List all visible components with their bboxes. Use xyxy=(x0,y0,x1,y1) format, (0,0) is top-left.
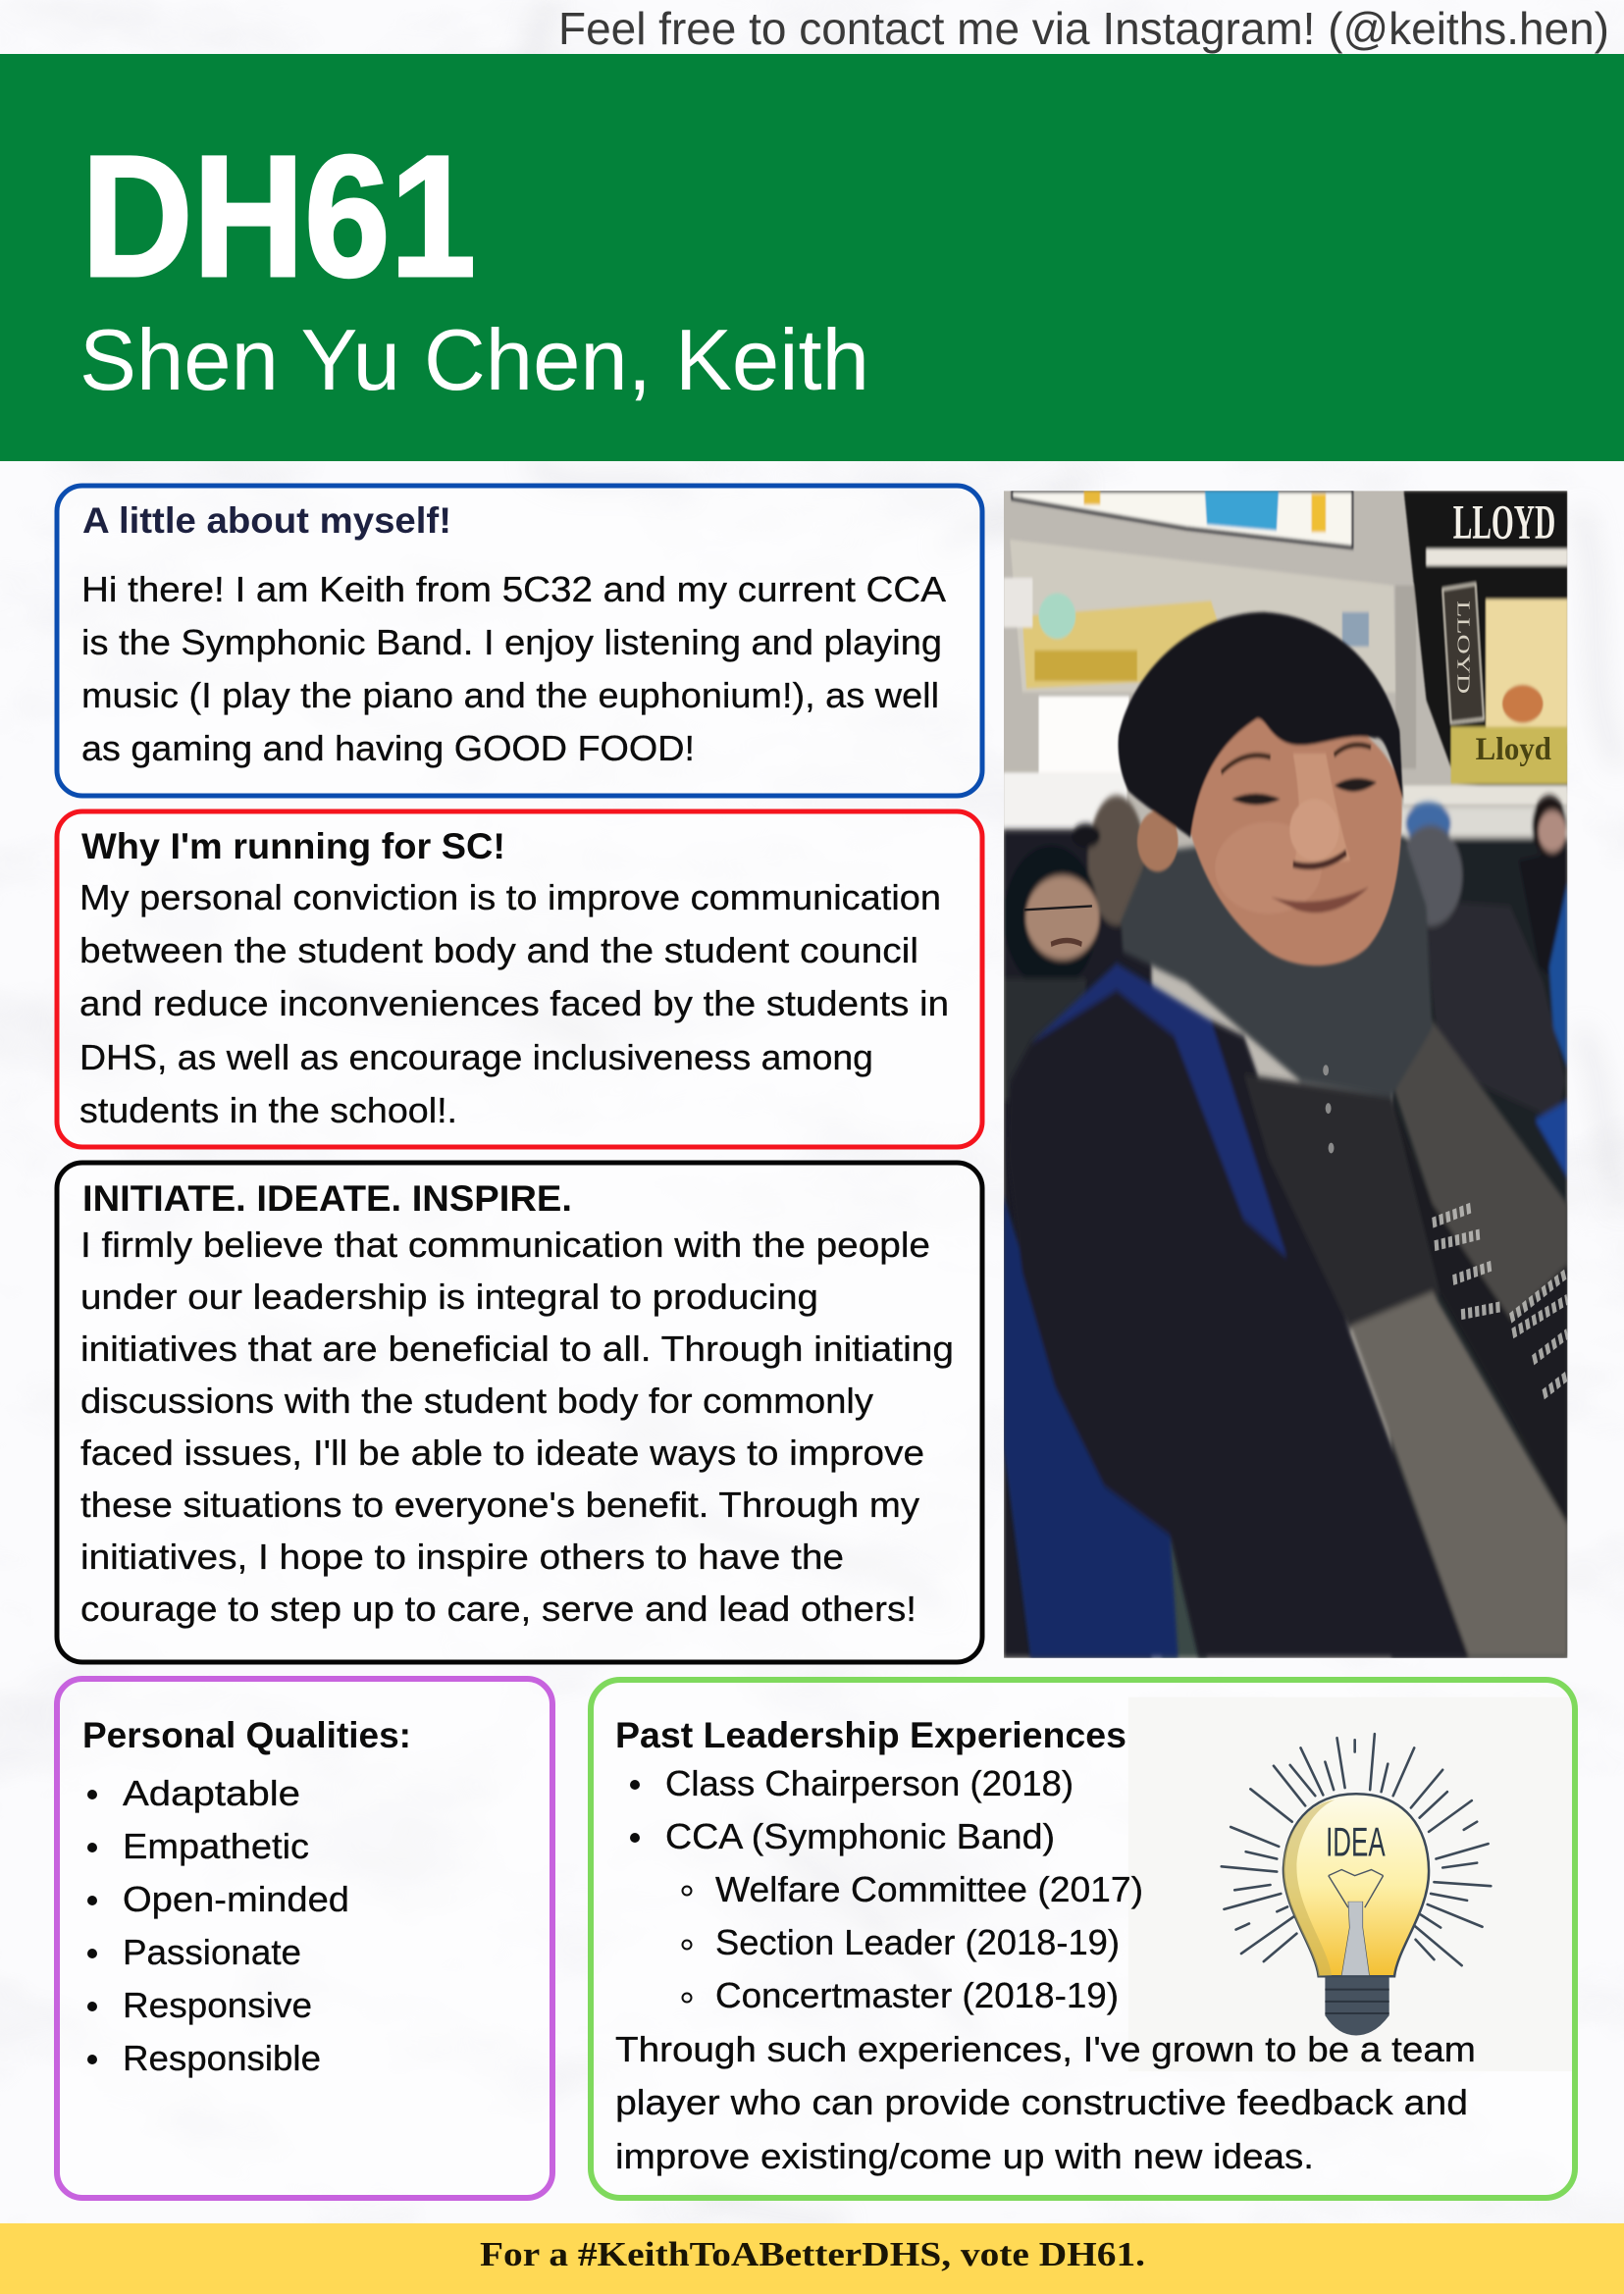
header band xyxy=(0,54,1624,461)
body text xyxy=(81,569,946,768)
slogan: For a #KeithToABetterDHS, vote DH61. xyxy=(480,2235,1145,2273)
store window xyxy=(1010,540,1395,693)
list of roles: CCA (Symphonic Band) xyxy=(665,1816,1055,1856)
jacket buttons xyxy=(1323,1065,1334,1154)
footer banner xyxy=(0,2223,1624,2294)
face xyxy=(1118,612,1403,965)
photo of candidate: LLOYD xyxy=(1453,495,1555,548)
icon: idea light bulb xyxy=(1128,1697,1577,2071)
dark store front xyxy=(1404,491,1567,792)
list of qualities: Passionate xyxy=(123,1932,301,1972)
scarf dark band xyxy=(1531,1264,1568,1525)
list of qualities: Responsible xyxy=(123,2038,321,2078)
body text xyxy=(79,877,949,1130)
body text: initiatives, I hope to inspire others to have the xyxy=(80,1537,844,1577)
body text: between the student body and the student council xyxy=(79,930,918,970)
list of qualities xyxy=(87,1773,349,2078)
scarf right strip xyxy=(1391,1020,1567,1319)
billboard xyxy=(1012,491,1352,547)
jacket xyxy=(1008,974,1469,1658)
title: candidate number: DH61 xyxy=(81,121,476,313)
body text: initiatives that are beneficial to all. Through initiating xyxy=(80,1329,954,1369)
right woman xyxy=(1532,796,1566,857)
candidate name: Shen Yu Chen, Keith xyxy=(79,311,869,408)
body text: discussions with the student body for commonly xyxy=(80,1381,873,1421)
body text: music (I play the piano and the euphonium!), as well xyxy=(81,675,939,715)
list of qualities: Open-minded xyxy=(123,1879,349,1919)
panel: why running for SC xyxy=(57,811,982,1147)
contact line: Feel free to contact me via Instagram! (@keiths.hen) xyxy=(558,3,1609,54)
body text: these situations to everyone's benefit. Through my xyxy=(80,1485,919,1525)
scarf pattern xyxy=(1433,1208,1567,1394)
heading: A little about myself! xyxy=(82,500,451,541)
backpack xyxy=(1004,1196,1179,1658)
list of qualities: Empathetic xyxy=(123,1826,309,1866)
panel border xyxy=(591,1680,1575,2198)
list of roles: Welfare Committee (2017) xyxy=(715,1869,1143,1909)
body text: as gaming and having GOOD FOOD! xyxy=(81,728,695,768)
heading: INITIATE. IDEATE. INSPIRE. xyxy=(82,1178,572,1219)
closing paragraph: improve existing/come up with new ideas. xyxy=(615,2136,1314,2176)
panel: past leadership experiences xyxy=(591,1680,1577,2198)
closing paragraph: player who can provide constructive feedback and xyxy=(615,2082,1468,2122)
closing paragraph: Through such experiences, I've grown to be a team xyxy=(615,2029,1476,2069)
panel: a little about myself xyxy=(57,486,982,796)
closing paragraph xyxy=(615,2029,1476,2176)
scarf light bottom xyxy=(1350,1291,1567,1658)
body text: My personal conviction is to improve communication xyxy=(79,877,941,917)
icon: idea light bulb: IDEA xyxy=(1326,1820,1386,1865)
crowd xyxy=(1004,830,1151,1658)
body text xyxy=(80,1225,954,1629)
body text: students in the school!. xyxy=(79,1090,457,1130)
photo of candidate: LLOYD xyxy=(1453,600,1473,694)
list of roles xyxy=(630,1763,1143,2015)
scarf neck xyxy=(1121,837,1433,1097)
left woman xyxy=(1005,848,1097,977)
body text: is the Symphonic Band. I enjoy listening and playing xyxy=(81,622,942,662)
left woman glasses xyxy=(1024,906,1092,910)
gap behind the legs xyxy=(1162,1525,1207,1658)
scarf hanging dark centre xyxy=(1244,1074,1441,1329)
photo of candidate xyxy=(1004,491,1567,1658)
body text: Hi there! I am Keith from 5C32 and my current CCA xyxy=(81,569,946,609)
body text: under our leadership is integral to producing xyxy=(80,1277,818,1317)
list of qualities: Responsive xyxy=(123,1985,312,2025)
list of roles: Section Leader (2018-19) xyxy=(715,1922,1120,1962)
body text: I firmly believe that communication with the people xyxy=(80,1225,930,1265)
list of qualities: Adaptable xyxy=(123,1773,300,1813)
body text: and reduce inconveniences faced by the students in xyxy=(79,983,949,1023)
body text: courage to step up to care, serve and lead others! xyxy=(80,1589,917,1629)
heading: Past Leadership Experiences xyxy=(615,1715,1126,1755)
panel: initiate ideate inspire xyxy=(57,1163,982,1662)
list of roles: Class Chairperson (2018) xyxy=(665,1763,1074,1803)
list of roles: Concertmaster (2018-19) xyxy=(715,1975,1119,2015)
heading: Why I'm running for SC! xyxy=(81,826,505,866)
panel: personal qualities xyxy=(57,1679,552,2198)
right person jacket xyxy=(1429,902,1566,1114)
heading: Personal Qualities: xyxy=(82,1715,411,1755)
body text: faced issues, I'll be able to ideate ways to improve xyxy=(80,1433,924,1473)
bright lights lower wall xyxy=(1039,697,1128,780)
body text: DHS, as well as encourage inclusiveness among xyxy=(79,1037,873,1077)
photo of candidate: Lloyd xyxy=(1476,731,1552,767)
